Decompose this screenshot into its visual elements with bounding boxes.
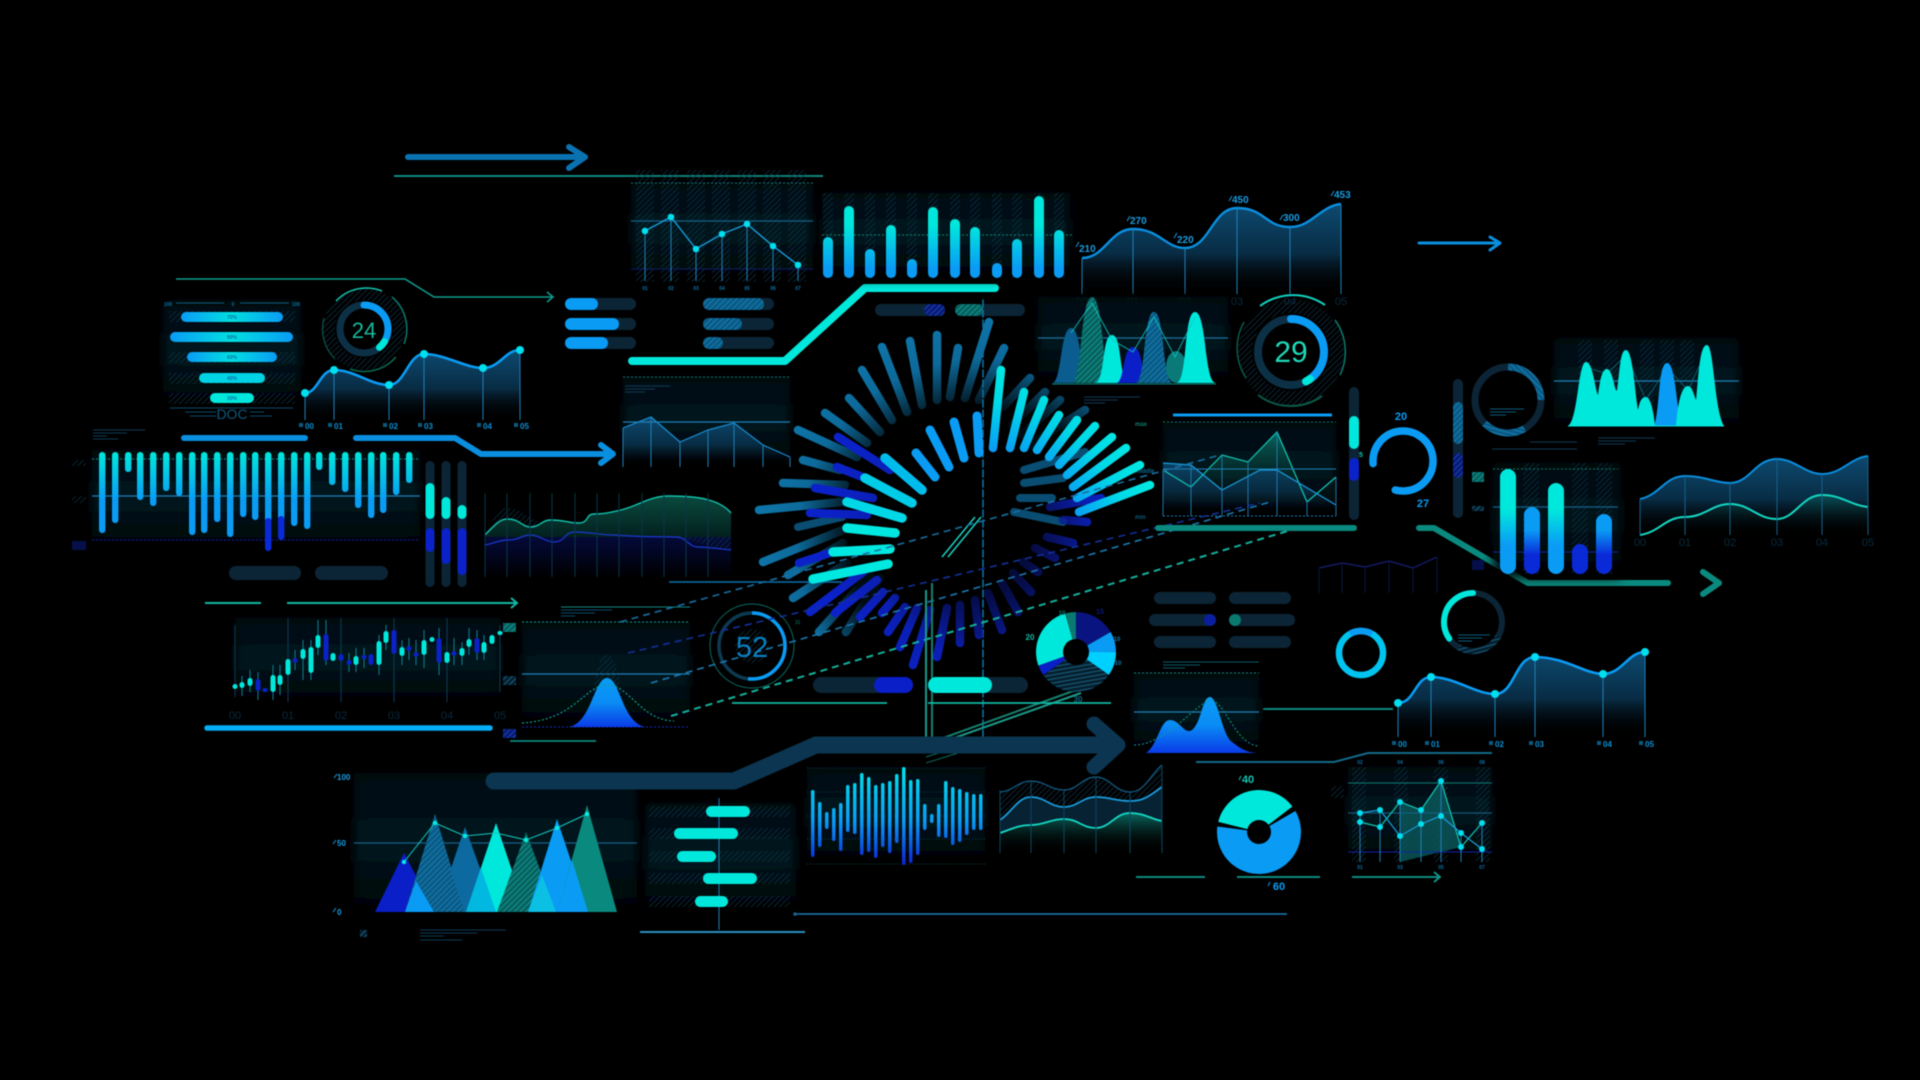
bar: 60% — [187, 352, 277, 362]
chart: candlesticks — [229, 618, 506, 722]
chart: blue area panel — [623, 377, 790, 467]
vertical pill: hatched — [1453, 379, 1463, 518]
chart: blue area line A: 02 — [389, 422, 398, 431]
chart: area 210 to 453: 210 — [1079, 244, 1096, 255]
burst: centre slashes — [942, 517, 981, 557]
burst: bright left cyan bars — [813, 458, 922, 579]
chart: green and blue area max middle min — [1135, 415, 1336, 521]
gauge: 24: 24 — [352, 318, 376, 343]
chart: green and blue area max middle min: max — [1135, 422, 1148, 428]
chart: triangles: 50 — [337, 839, 346, 848]
burst: vertical dashed axis — [982, 300, 984, 740]
blank dark pills — [229, 566, 388, 580]
radial burst — [759, 300, 1150, 740]
chart: area 210 to 453: 270 — [1130, 216, 1147, 227]
gauge: 52: 31 — [795, 620, 801, 626]
burst: long right gradient bars — [993, 370, 1150, 512]
chart: normal distribution — [503, 607, 690, 741]
chart: blue area line A: 00 — [305, 422, 314, 431]
donut: 40 and 60 — [1222, 774, 1296, 893]
connector: thin teal step — [1196, 753, 1492, 762]
chart: lower right blue area: 04 — [1603, 740, 1612, 749]
chart: bars with deep blue base — [1472, 463, 1621, 578]
donut: 40 and 60: 60 — [1273, 881, 1285, 893]
chart: blue area line A: 05 — [520, 422, 529, 431]
chart: hatched line plot: 05 — [744, 286, 750, 292]
chart: faint indigo line — [1319, 557, 1437, 593]
panel: horizontal percent pills: 60% — [227, 355, 238, 361]
bar: cyan-blue underline — [207, 725, 490, 731]
ring: small cyan — [1331, 623, 1391, 683]
chart: area 210 to 453: 04 — [1284, 296, 1296, 308]
chart: two-series points: 08 — [1479, 760, 1485, 766]
chart: candlesticks: 01 — [282, 710, 294, 722]
chart: blue area line A: 01 — [334, 422, 343, 431]
donut: segmented: 10 — [1115, 661, 1122, 667]
arrow: top left connector — [176, 279, 553, 302]
panel: offset bars — [640, 798, 805, 932]
chart: lower right blue area: 03 — [1535, 740, 1544, 749]
chart: right wave pair: 01 — [1679, 537, 1691, 549]
vertical pill: cyan and blue — [1349, 387, 1363, 520]
chart: blue mountain — [1134, 662, 1259, 753]
chart: hatched line plot: 06 — [770, 286, 776, 292]
small lines: peaks caption — [1084, 397, 1140, 403]
chart: green and blue area max middle min: min — [1135, 515, 1146, 521]
chart: area 210 to 453: 03 — [1231, 296, 1243, 308]
ring: cyan arc — [1433, 582, 1513, 662]
connector: thick cyan — [632, 288, 995, 361]
chart: two-series points — [1331, 760, 1492, 871]
panel: horizontal percent pills: 70% — [227, 315, 238, 321]
chart: hatched line plot: 01 — [642, 286, 648, 292]
gauge: 29: 29 — [1274, 336, 1308, 369]
chart: area 210 to 453: 00 — [1076, 296, 1088, 308]
chart: two-series points: 01 — [1357, 865, 1363, 871]
chart: right wave pair: 00 — [1634, 537, 1646, 549]
chart: right wave pair: 02 — [1724, 537, 1736, 549]
chart: green and blue area max middle min: middle — [1135, 469, 1155, 475]
chart: right wave pair — [1634, 456, 1874, 549]
panel: horizontal percent pills: 40% — [227, 376, 238, 382]
chart: area 210 to 453: 01 — [1127, 296, 1139, 308]
chart: two-series points: 04 — [1397, 760, 1403, 766]
divider line: top teal — [394, 175, 823, 177]
arrow: top blue — [408, 147, 585, 168]
panel: horizontal percent pills — [163, 300, 301, 422]
lines: teal under donut with arrow — [1136, 872, 1440, 882]
arrow: big dark — [494, 724, 1118, 781]
donut: segmented: 20 — [1026, 633, 1035, 642]
chart: overlapping peaks — [1038, 297, 1228, 385]
line: teal link — [1263, 708, 1393, 710]
chart: area 210 to 453: 220 — [1177, 235, 1194, 246]
gauge: 29 — [1237, 295, 1345, 406]
chart: lower right blue area — [1392, 648, 1654, 749]
chart: area 210 to 453: 450 — [1232, 195, 1249, 206]
toggles: top centre pair — [875, 304, 1025, 316]
chart: candlesticks: 00 — [229, 710, 241, 722]
chart: waveform — [807, 767, 985, 865]
arrow: teal lower left — [205, 598, 517, 608]
chart: right wave pair: 05 — [1862, 537, 1874, 549]
chart: area 210 to 453: 02 — [1179, 296, 1191, 308]
line: long thin blue — [793, 912, 1287, 916]
chart: hatched line plot — [631, 170, 813, 292]
arrow: thin blue top right — [1419, 237, 1500, 250]
chart: hatched line plot: 02 — [668, 286, 674, 292]
bar: 20% — [210, 393, 254, 403]
bar: 90% — [170, 332, 293, 342]
gauge: arc 20 to 27: 27 — [1417, 498, 1429, 510]
frame: teal perspective lines — [926, 583, 1081, 763]
chart: hanging bars — [72, 430, 420, 552]
gauge: arc 20 to 27 — [1370, 411, 1436, 510]
chart: hatched line plot: 03 — [693, 286, 699, 292]
chart: two-series points: 07 — [1479, 865, 1485, 871]
gauge: 52: 52 — [736, 632, 768, 664]
chart: lower right blue area: 02 — [1495, 740, 1504, 749]
burst: outer dark ring — [759, 322, 1085, 632]
chart: hatched line plot: 07 — [795, 286, 801, 292]
vertical pill: cyan and blue: 5 — [1359, 452, 1363, 459]
donut: segmented: 10 — [1059, 611, 1066, 617]
chart: right wave pair: 03 — [1771, 537, 1783, 549]
chart: lower right blue area: 05 — [1645, 740, 1654, 749]
bar: 40% — [199, 373, 265, 383]
chart: blue area line A: 03 — [424, 422, 433, 431]
donut: 40 and 60: 40 — [1242, 774, 1254, 786]
chart: area 210 to 453: 05 — [1335, 296, 1347, 308]
chart: green area layers — [485, 493, 731, 577]
chart: candlesticks: 05 — [494, 710, 506, 722]
donut: segmented — [1026, 609, 1122, 704]
toggles: lower centre — [813, 677, 1028, 693]
bar: 70% — [181, 312, 283, 322]
chart: blue area line A: 04 — [483, 422, 492, 431]
chart: hatched line plot: 04 — [719, 286, 725, 292]
chart: triangles: 0 — [337, 908, 342, 917]
vertical level pills — [426, 461, 466, 587]
ring: hatched — [1463, 355, 1553, 445]
bar: blue underline — [184, 435, 305, 441]
burst: bright top blue bars — [916, 416, 979, 477]
toggles: right six — [1149, 592, 1295, 648]
panel: horizontal percent pills: 100 — [164, 302, 172, 308]
chart: triangles: 100 — [337, 773, 351, 782]
toggles: three hatched pills — [703, 298, 774, 349]
burst: deep blue bars — [799, 437, 1101, 665]
label: DOC: DOC — [216, 406, 248, 422]
chart: two-series points: 05 — [1438, 865, 1444, 871]
dashed diagonals — [620, 455, 1301, 716]
chart: area 210 to 453: 300 — [1283, 213, 1300, 224]
small lines: peaks caption right — [1492, 438, 1655, 449]
burst: inner right dark bars — [798, 452, 1085, 527]
panel: horizontal percent pills: 20% — [227, 396, 238, 402]
chart: top rounded bars — [822, 193, 1072, 279]
chart: area 210 to 453: 453 — [1334, 190, 1351, 201]
chart: candlesticks: 04 — [441, 710, 453, 722]
chart: lower right blue area: 00 — [1398, 740, 1407, 749]
line: blue chart base — [669, 581, 842, 583]
chart: lower right blue area: 01 — [1431, 740, 1440, 749]
chart: two-series points: 03 — [1397, 865, 1403, 871]
chart: right wave pair: 04 — [1816, 537, 1828, 549]
chart: area 210 to 453 — [1076, 190, 1351, 308]
panel: horizontal percent pills: 100 — [292, 302, 300, 308]
chart: two-series points: 02 — [1357, 760, 1363, 766]
panel: horizontal percent pills: 0 — [232, 302, 235, 308]
panel: horizontal percent pills: 90% — [227, 335, 238, 341]
chart: three wave lines — [1000, 765, 1162, 853]
donut: segmented: 10 — [1114, 637, 1121, 643]
chart: two-series points: 06 — [1438, 760, 1444, 766]
toggles: three blue pills — [565, 298, 636, 349]
chart: blue area line A — [299, 346, 529, 431]
lines: teal pair under toggles — [732, 702, 1111, 704]
donut: segmented: 30 — [1074, 695, 1083, 704]
chart: candlesticks: 02 — [335, 710, 347, 722]
chart: cyan peaks — [1554, 338, 1739, 432]
gauge: 52 — [710, 604, 801, 688]
connector: teal chevron right — [1158, 528, 1719, 594]
gauge: arc 20 to 27: 20 — [1395, 411, 1407, 423]
gauge: 24 — [323, 288, 407, 371]
chart: triangles — [333, 773, 637, 940]
chart: candlesticks: 03 — [388, 710, 400, 722]
arrow: blue connector — [356, 438, 613, 463]
donut: segmented: 15 — [1096, 609, 1104, 616]
